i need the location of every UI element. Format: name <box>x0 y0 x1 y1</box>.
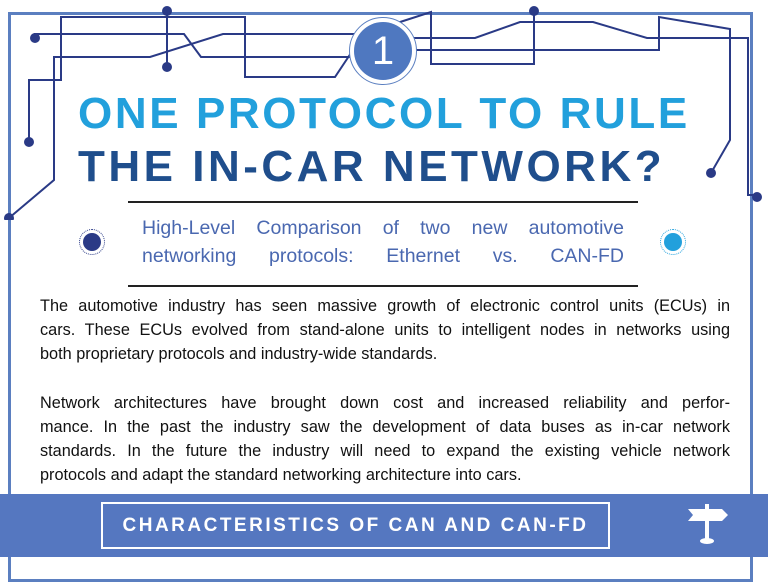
body paragraph 1 <box>40 297 730 363</box>
body paragraph 2: Network architectures have brought down cost and increased reliability and perfor- <box>40 394 730 412</box>
circuit lines <box>4 6 762 220</box>
title line 1: ONE PROTOCOL TO RULE <box>78 89 690 138</box>
section heading box: CHARACTERISTICS OF CAN AND CAN-FD <box>122 515 588 536</box>
icon: light blue dot <box>660 229 686 255</box>
badge: number 1 <box>349 17 417 85</box>
icon: signpost <box>688 504 728 544</box>
icon: navy dot <box>79 229 105 255</box>
section heading box <box>101 502 610 549</box>
body paragraph 2: standards. In the future the industry will need to expand the existing vehicle network <box>40 442 730 460</box>
body paragraph 1: cars. These ECUs evolved from stand-alone units to intelligent nodes in networks using <box>40 321 730 339</box>
subtitle <box>142 217 624 267</box>
subtitle: High-Level Comparison of two new automotive <box>142 217 624 239</box>
body paragraph 2: protocols and adapt the standard networking architecture into cars. <box>40 466 521 484</box>
body paragraph 2 <box>40 394 730 484</box>
badge: number 1: 1 <box>372 29 394 73</box>
subtitle: networking protocols: Ethernet vs. CAN-FD <box>142 245 624 267</box>
title line 2: THE IN-CAR NETWORK? <box>78 142 665 191</box>
body paragraph 1: both proprietary protocols and industry-wide standards. <box>40 345 437 363</box>
section band <box>0 494 768 557</box>
body paragraph 1: The automotive industry has seen massive growth of electronic control units (ECUs) in <box>40 297 730 315</box>
body paragraph 2: mance. In the past the industry saw the development of data buses as in-car network <box>40 418 730 436</box>
